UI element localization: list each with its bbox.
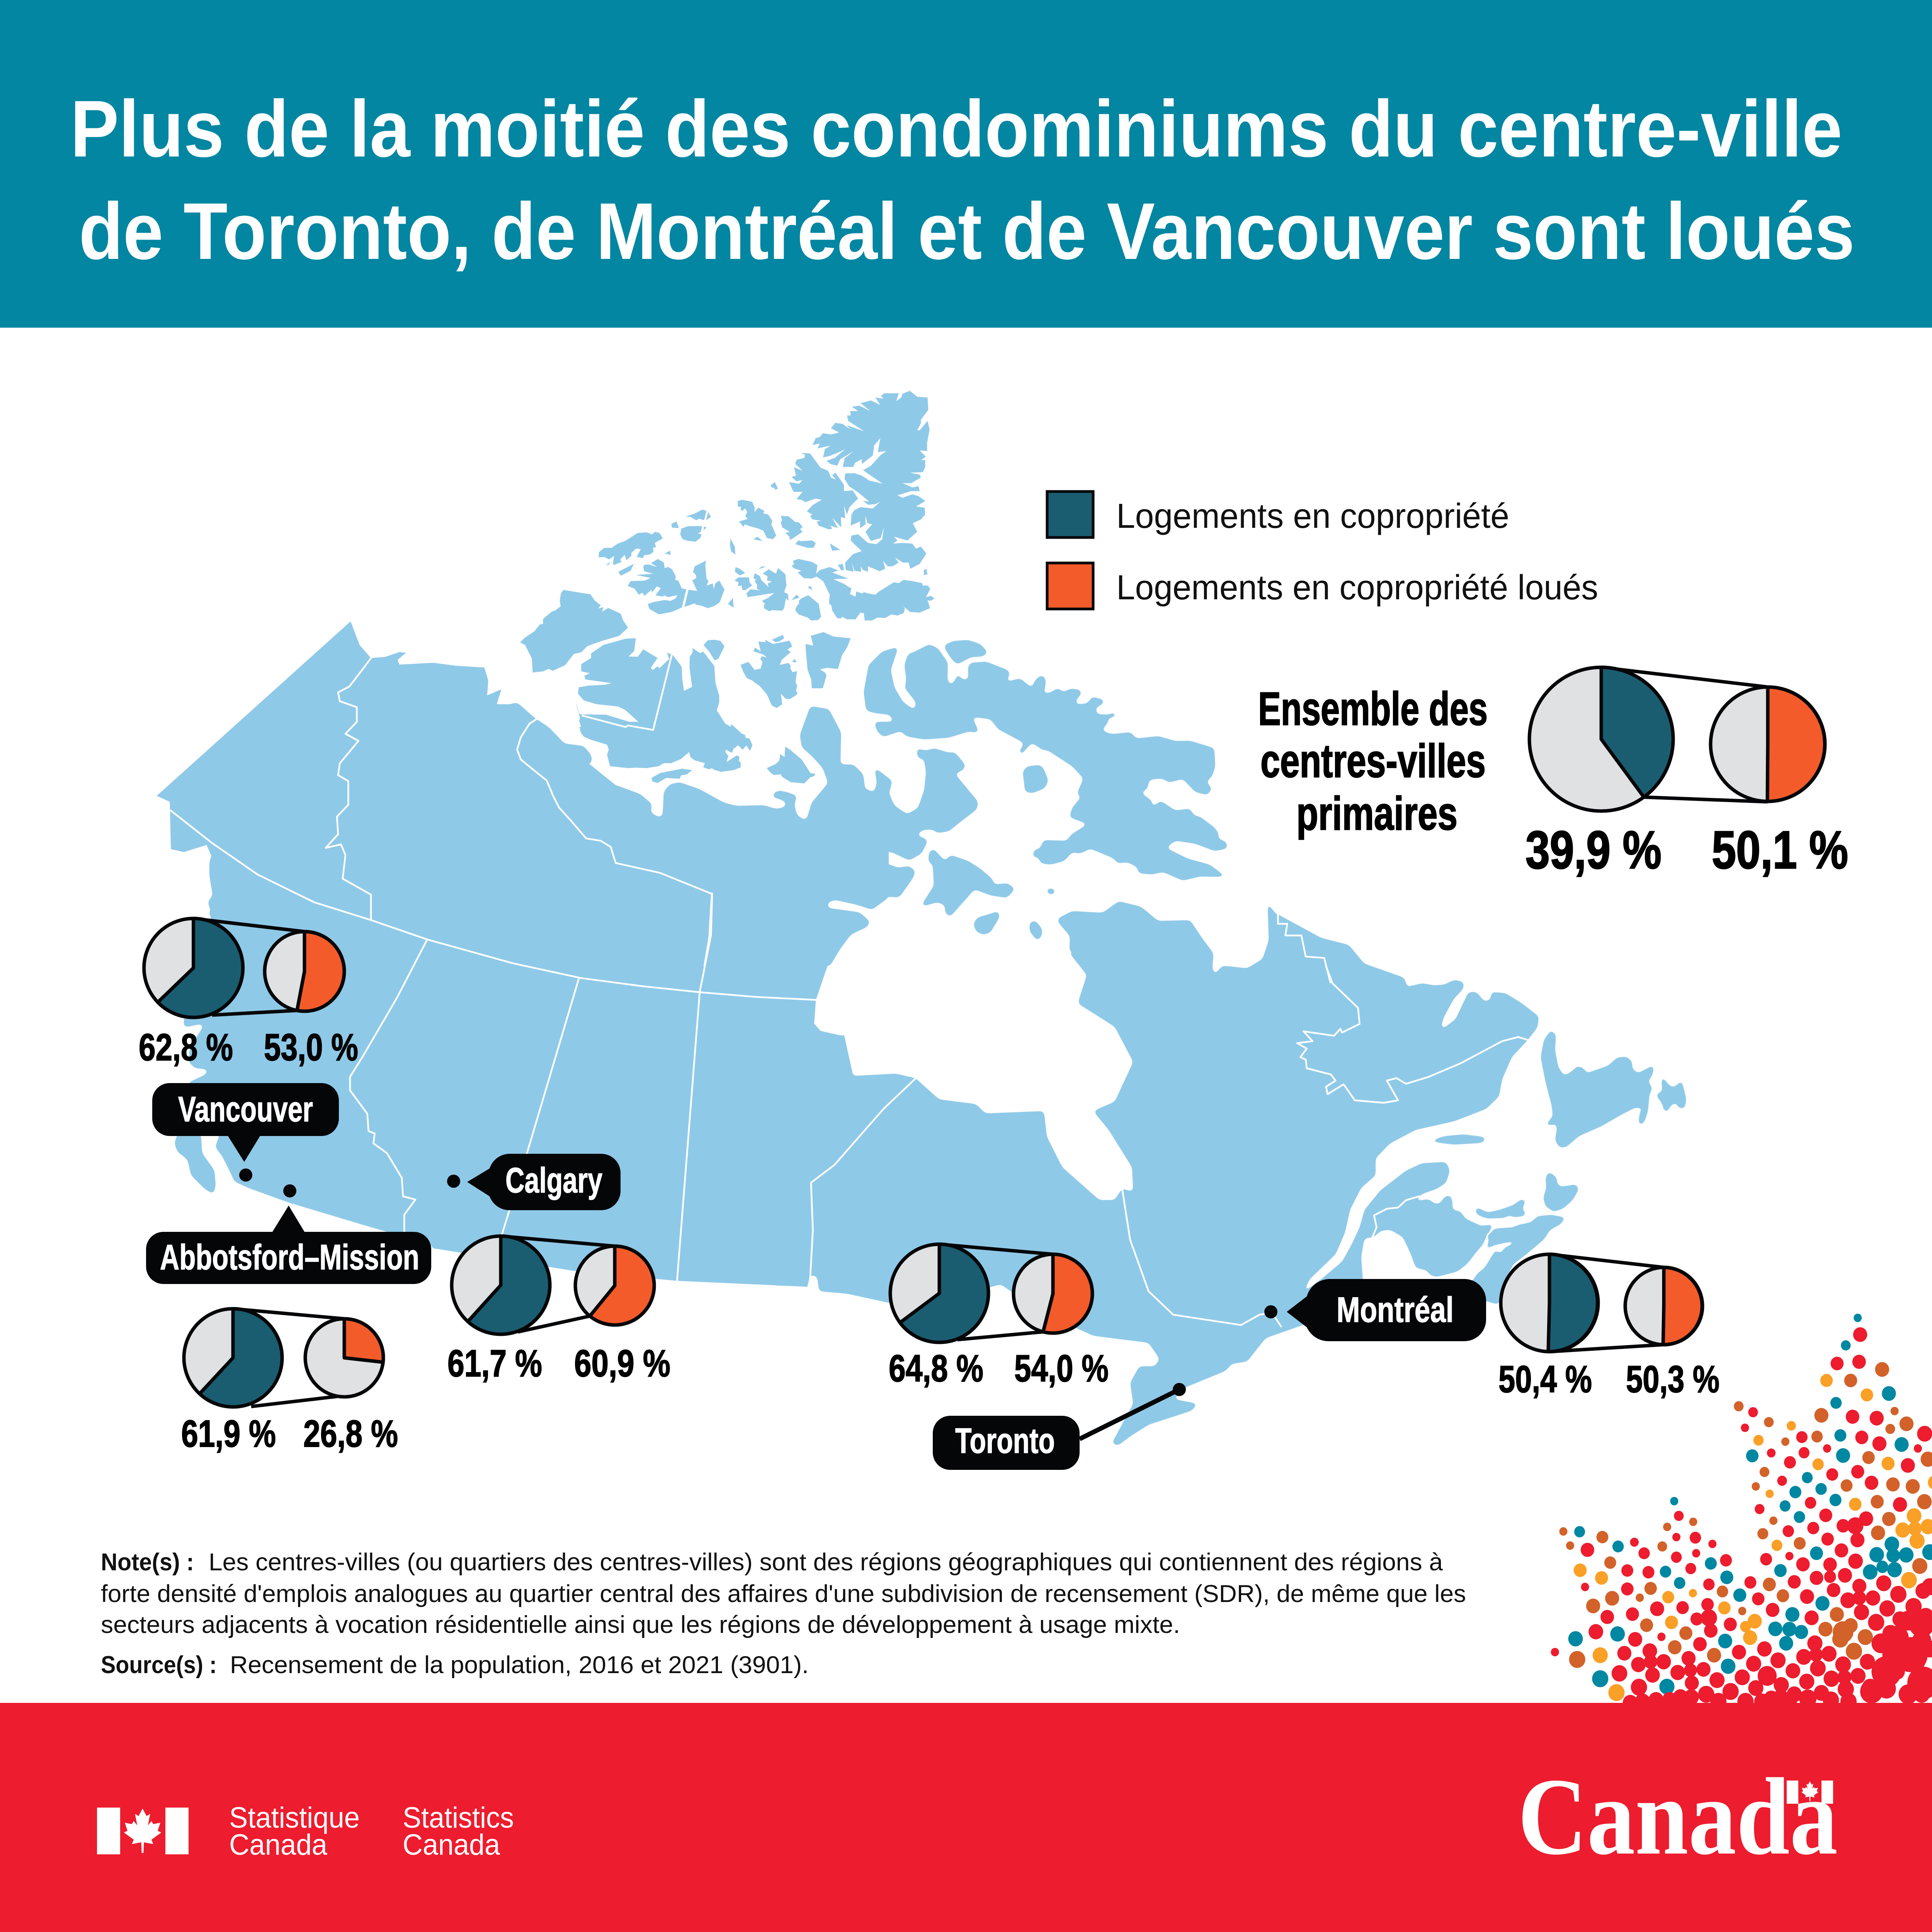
notes and sources: Les centres-villes (ou quartiers des centres-villes) sont des régions géographiques qui contiennent des régions à <box>209 1549 1443 1576</box>
value: Toronto rented: 54,0 % <box>1014 1347 1109 1389</box>
label: Vancouver <box>152 1083 339 1162</box>
provincial and territorial borders <box>171 653 1528 1327</box>
value: all primary downtowns condos: 39,9 % <box>1526 820 1662 880</box>
label: Calgary <box>467 1154 621 1210</box>
label: Calgary: Calgary <box>505 1161 602 1200</box>
heading: all primary downtowns: primaires <box>1296 787 1458 840</box>
landmass: Baffin and northern Hudson Bay <box>850 640 1236 1005</box>
pie pair: Vancouver <box>144 918 344 1017</box>
value: Calgary condos: 61,7 % <box>447 1342 542 1384</box>
water: Prince Albert Sound <box>576 694 638 722</box>
legend <box>1047 492 1598 609</box>
title banner <box>0 0 1932 328</box>
value: all primary downtowns rented: 50,1 % <box>1712 820 1848 880</box>
marker: Abbotsford-Mission <box>283 1184 296 1197</box>
landmass: northern mainland coast <box>502 702 889 966</box>
label: Toronto <box>933 1416 1080 1470</box>
label: Montréal <box>1287 1279 1486 1341</box>
value: Toronto condos: 64,8 % <box>889 1347 983 1389</box>
label: Abbotsford-Mission: Abbotsford–Mission <box>160 1238 419 1277</box>
value: Abbotsford-Mission rented: 26,8 % <box>303 1412 398 1455</box>
footer band <box>0 1703 1932 1932</box>
value: Abbotsford-Mission condos: 61,9 % <box>181 1412 276 1455</box>
pie pair: Montréal <box>1501 1254 1702 1352</box>
decorative maple leaves made of dots <box>1551 1314 1932 1711</box>
label: Montréal: Montréal <box>1337 1290 1454 1330</box>
marker: Montréal <box>1264 1305 1277 1318</box>
notes and sources: forte densité d'emplois analogues au quartier central des affaires d'une subdivision de recensement (SDR), de même que les <box>101 1580 1466 1607</box>
department name, English: Statistics <box>403 1801 514 1834</box>
value: Vancouver rented: 53,0 % <box>264 1026 358 1068</box>
label: Vancouver: Vancouver <box>178 1090 313 1129</box>
heading: all primary downtowns: centres-villes <box>1260 735 1486 787</box>
notes and sources: Recensement de la population, 2016 et 2021 (3901). <box>230 1651 809 1679</box>
department name, English: Canada <box>403 1828 500 1861</box>
heading: all primary downtowns: Ensemble des <box>1258 682 1488 735</box>
landmass: Labrador, Maritimes and Newfoundland <box>1198 966 1686 1352</box>
notes and sources: Note(s) : <box>101 1549 194 1576</box>
Government of Canada flag symbol <box>97 1808 189 1854</box>
Canada wordmark: Canada <box>1518 1755 1838 1878</box>
pie pair: Toronto <box>890 1244 1092 1342</box>
label: Abbotsford-Mission <box>146 1206 431 1284</box>
legend label: rented condos: Logements en copropriété loués <box>1116 568 1598 607</box>
value: Calgary rented: 60,9 % <box>574 1342 670 1384</box>
map of Canada <box>157 391 1686 1446</box>
landmass: Ontario and Quebec <box>773 903 1463 1446</box>
legend swatch: rented condos <box>1047 563 1093 609</box>
landmass: western Arctic islands <box>520 590 815 783</box>
marker: Calgary <box>447 1175 460 1188</box>
value: Montréal rented: 50,3 % <box>1626 1358 1719 1400</box>
notes and sources: Source(s) : <box>101 1651 217 1679</box>
marker: Vancouver <box>239 1168 252 1182</box>
landmass: western Canada <box>157 621 853 1287</box>
label: Toronto: Toronto <box>955 1421 1055 1461</box>
department name, French: Canada <box>229 1828 328 1861</box>
notes and sources <box>101 1549 1466 1679</box>
department name, English <box>403 1801 514 1861</box>
pie pair: Abbotsford-Mission <box>184 1309 383 1407</box>
department name, French: Statistique <box>229 1801 360 1834</box>
heading: all primary downtowns <box>1258 682 1488 840</box>
landmass: British Columbia coast and Vancouver Island <box>174 850 502 1236</box>
leader line and marker: Toronto <box>1080 1383 1186 1439</box>
legend swatch: condo dwellings <box>1047 492 1093 537</box>
pie pair: Calgary <box>452 1236 654 1334</box>
department name, French <box>229 1801 360 1861</box>
legend label: condo dwellings: Logements en copropriété <box>1116 497 1509 536</box>
landmass: Arctic archipelago <box>599 391 934 708</box>
value: Vancouver condos: 62,8 % <box>139 1026 233 1068</box>
notes and sources: secteurs adjacents à vocation résidentielle ainsi que les régions de développement à usage mixte. <box>101 1611 1180 1638</box>
value: Montréal condos: 50,4 % <box>1498 1358 1592 1400</box>
pie pair: all primary downtowns <box>1529 667 1825 811</box>
